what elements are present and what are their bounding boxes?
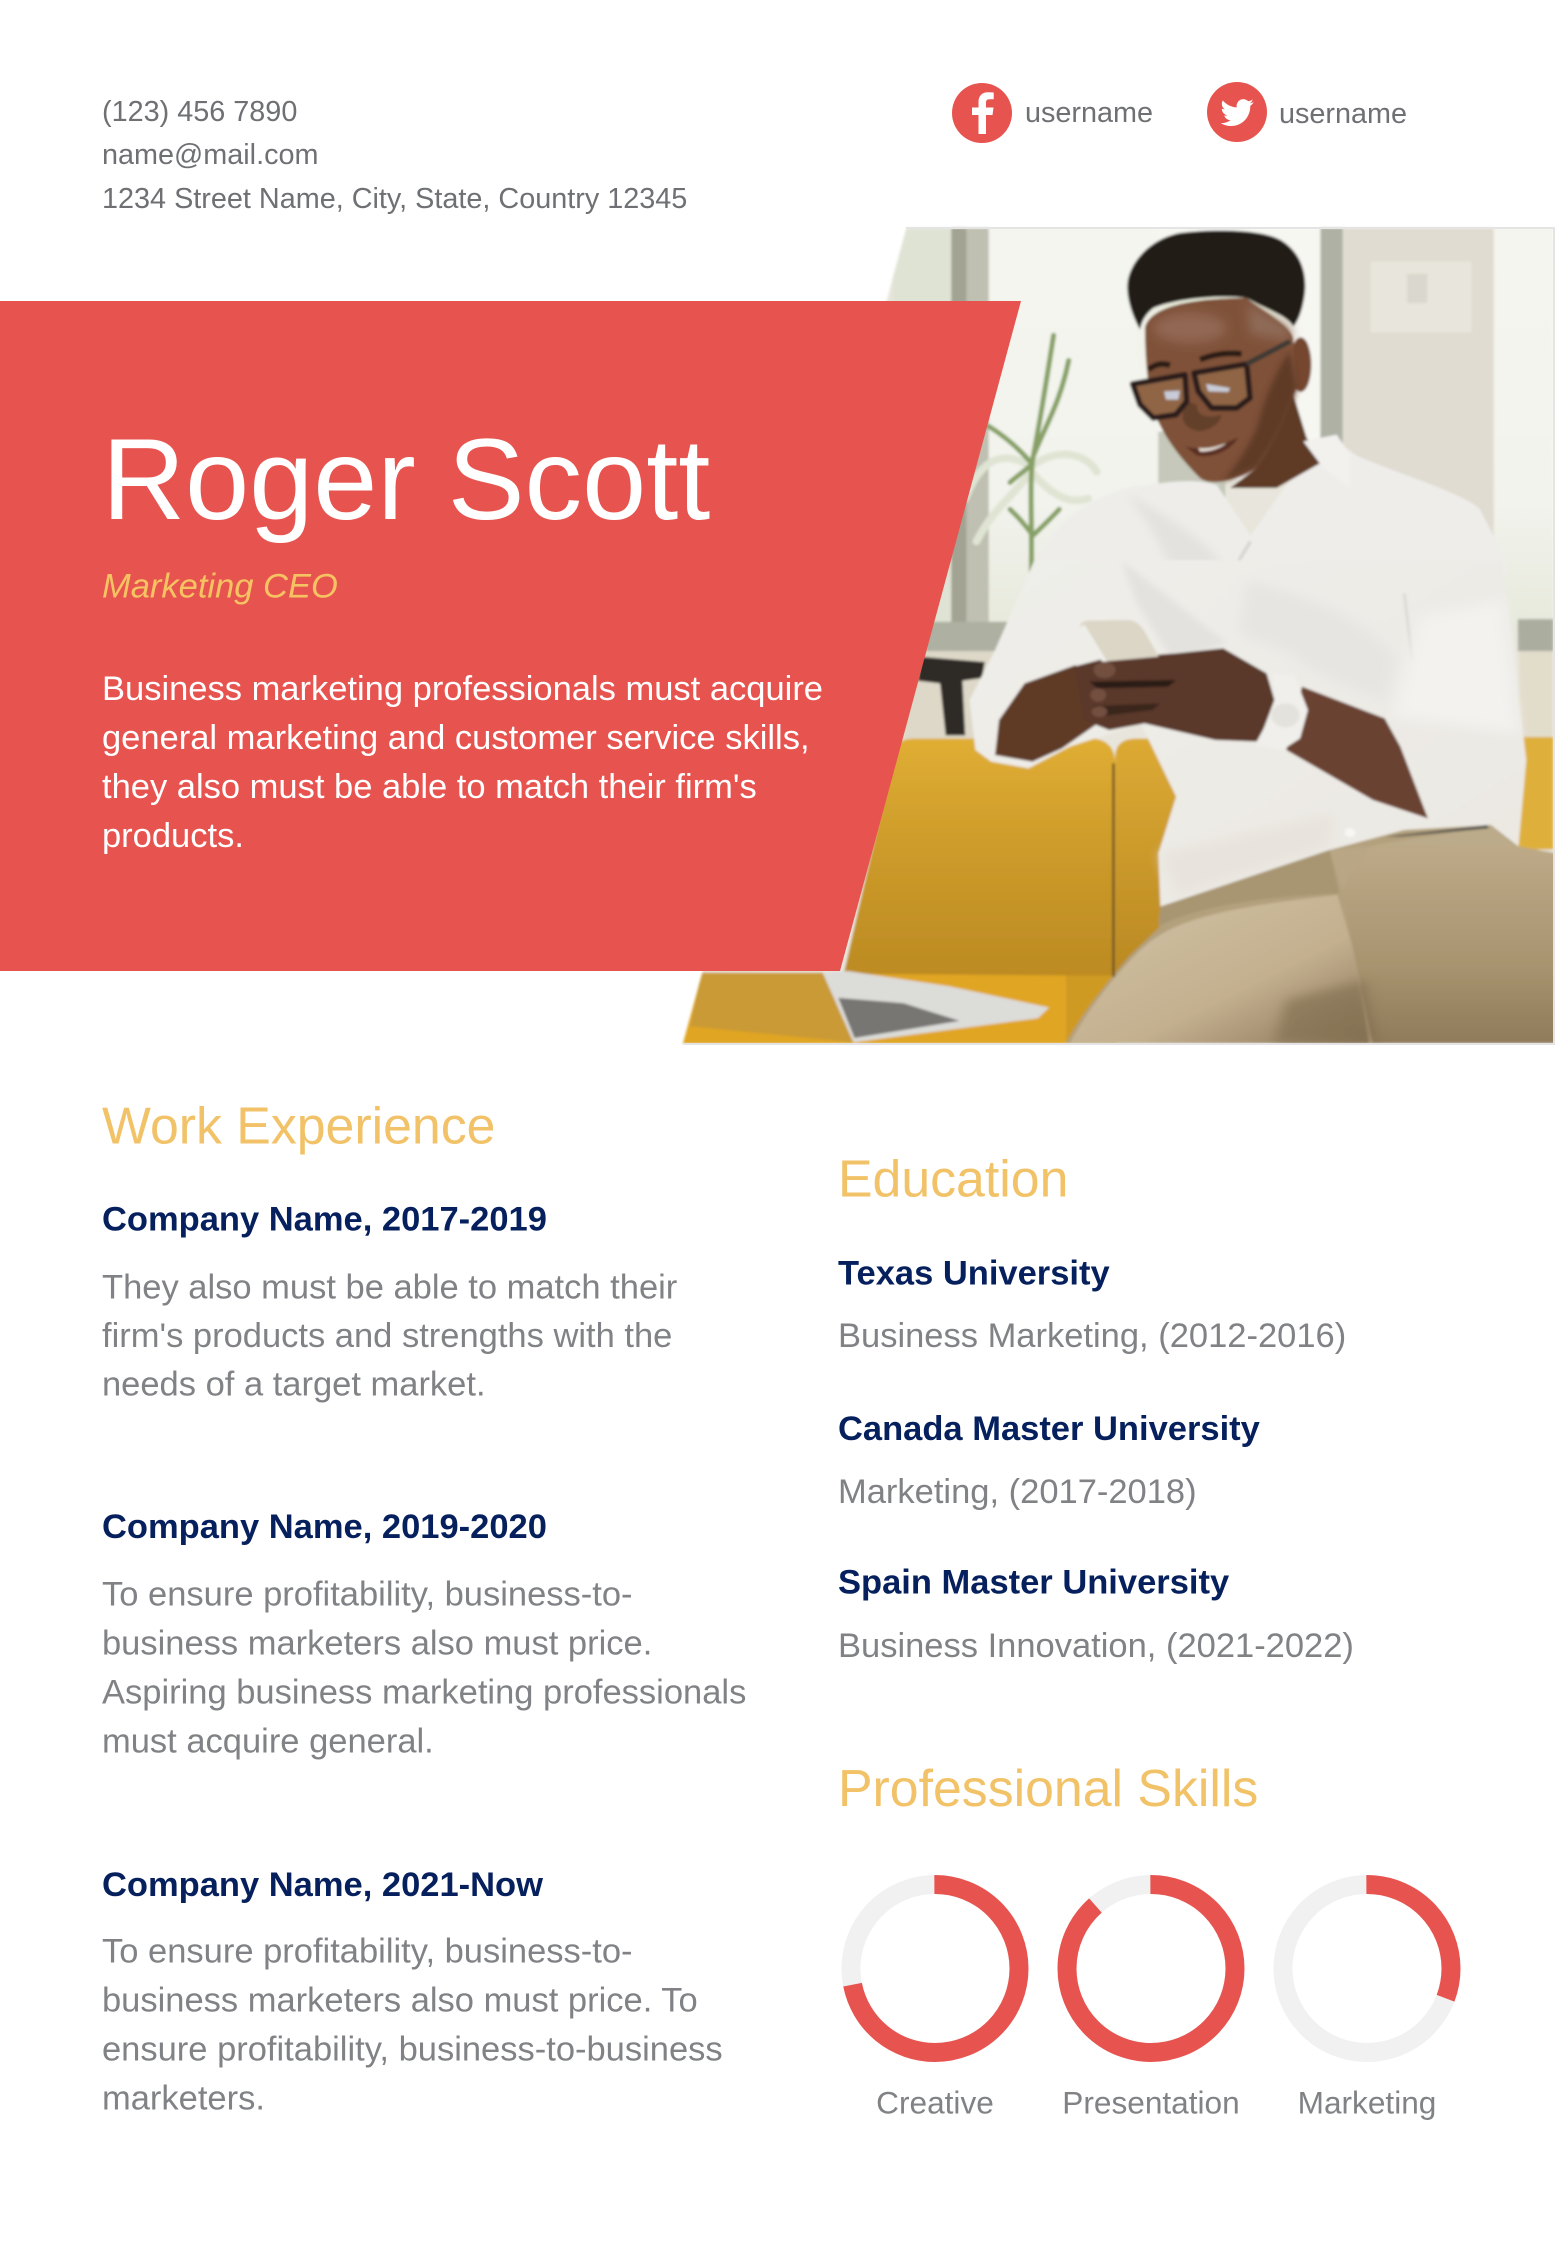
school 1: Business Marketing, (2012-2016)	[838, 1317, 1346, 1355]
hero panel	[0, 301, 1021, 971]
school 1: Texas University	[838, 1254, 1110, 1292]
heading: professional skills: Professional Skills	[838, 1759, 1258, 1817]
job 2: Company Name, 2019-2020	[102, 1508, 547, 1546]
donut: marketing: Marketing	[1298, 2084, 1436, 2120]
glasses	[1133, 364, 1250, 418]
plant	[965, 335, 1097, 579]
contact details: 1234 Street Name, City, State, Country 12345	[102, 183, 687, 215]
icon: twitter	[1207, 82, 1267, 142]
donut: presentation: Presentation	[1062, 2084, 1240, 2120]
hair	[1127, 231, 1305, 330]
neck	[1230, 395, 1323, 488]
job 3: To ensure profitability, business-to-	[102, 1932, 633, 1970]
school 3	[838, 1564, 1354, 1665]
shirt lower	[970, 560, 1526, 907]
contact details: (123) 456 7890	[102, 96, 297, 128]
photo edge	[684, 228, 1554, 1044]
job 3: ensure profitability, business-to-business	[102, 2030, 723, 2068]
job 1: needs of a target market.	[102, 1366, 486, 1404]
panel: professional skills	[838, 1759, 1451, 2120]
summary: they also must be able to match their firm's	[102, 768, 757, 806]
job 3: Company Name, 2021-Now	[102, 1866, 543, 1904]
panel: work experience	[102, 1096, 746, 2118]
summary: Business marketing professionals must acquire	[102, 670, 823, 708]
laptop	[690, 973, 853, 1042]
job 1: Company Name, 2017-2019	[102, 1200, 547, 1238]
name: Roger Scott	[102, 416, 710, 544]
social: facebook	[952, 83, 1153, 143]
summary: general marketing and customer service skills,	[102, 719, 810, 757]
forearm left	[995, 665, 1095, 762]
shirt upper	[1156, 449, 1495, 561]
job 3: marketers.	[102, 2080, 265, 2118]
table	[680, 973, 1066, 1045]
chair	[918, 657, 985, 735]
job 1: firm's products and strengths with the	[102, 1317, 672, 1355]
pants	[1066, 825, 1557, 1043]
mask: page margin below and right of photo	[0, 220, 1557, 1060]
face	[1145, 298, 1297, 482]
contact details	[102, 96, 687, 215]
school 1	[838, 1254, 1346, 1355]
sofa	[842, 739, 1115, 981]
social: facebook: username	[1025, 97, 1153, 129]
hand	[1074, 648, 1274, 742]
phone	[1080, 620, 1159, 662]
mouth	[1185, 437, 1238, 456]
nose	[1183, 401, 1222, 431]
panel: education	[838, 1150, 1354, 1665]
photo: man with phone on yellow sofa	[680, 220, 1557, 1060]
heading: education: Education	[838, 1150, 1068, 1208]
sofa gap	[1112, 763, 1115, 977]
summary	[102, 670, 823, 855]
donut: presentation	[1062, 1884, 1240, 2120]
job 2: business marketers also must price.	[102, 1624, 652, 1662]
job 2: To ensure profitability, business-to-	[102, 1576, 633, 1614]
school 2	[838, 1410, 1260, 1511]
summary: products.	[102, 817, 244, 855]
job 3	[102, 1866, 723, 2118]
watch	[1255, 673, 1308, 750]
donut: creative	[851, 1884, 1019, 2120]
school 2: Marketing, (2017-2018)	[838, 1473, 1197, 1511]
forearm right	[1286, 687, 1428, 818]
donut: marketing	[1283, 1884, 1451, 2120]
icon: facebook	[952, 83, 1012, 143]
heading: work experience: Work Experience	[102, 1096, 495, 1154]
donut: creative: Creative	[876, 2084, 994, 2120]
job 3: business marketers also must price. To	[102, 1982, 698, 2020]
social: twitter	[1207, 82, 1407, 142]
contact details: name@mail.com	[102, 139, 318, 171]
school 2: Canada Master University	[838, 1410, 1260, 1448]
collar	[1303, 435, 1350, 488]
job 1: They also must be able to match their	[102, 1268, 677, 1306]
school 3: Business Innovation, (2021-2022)	[838, 1627, 1354, 1665]
social: twitter: username	[1279, 98, 1407, 130]
job title: Marketing CEO	[102, 568, 338, 606]
job 2	[102, 1508, 746, 1760]
eyebrows	[1148, 353, 1242, 370]
job 2: Aspiring business marketing professionals	[102, 1674, 746, 1712]
job 1	[102, 1200, 677, 1404]
ear	[1290, 337, 1311, 392]
school 3: Spain Master University	[838, 1564, 1229, 1602]
job 2: must acquire general.	[102, 1722, 434, 1760]
